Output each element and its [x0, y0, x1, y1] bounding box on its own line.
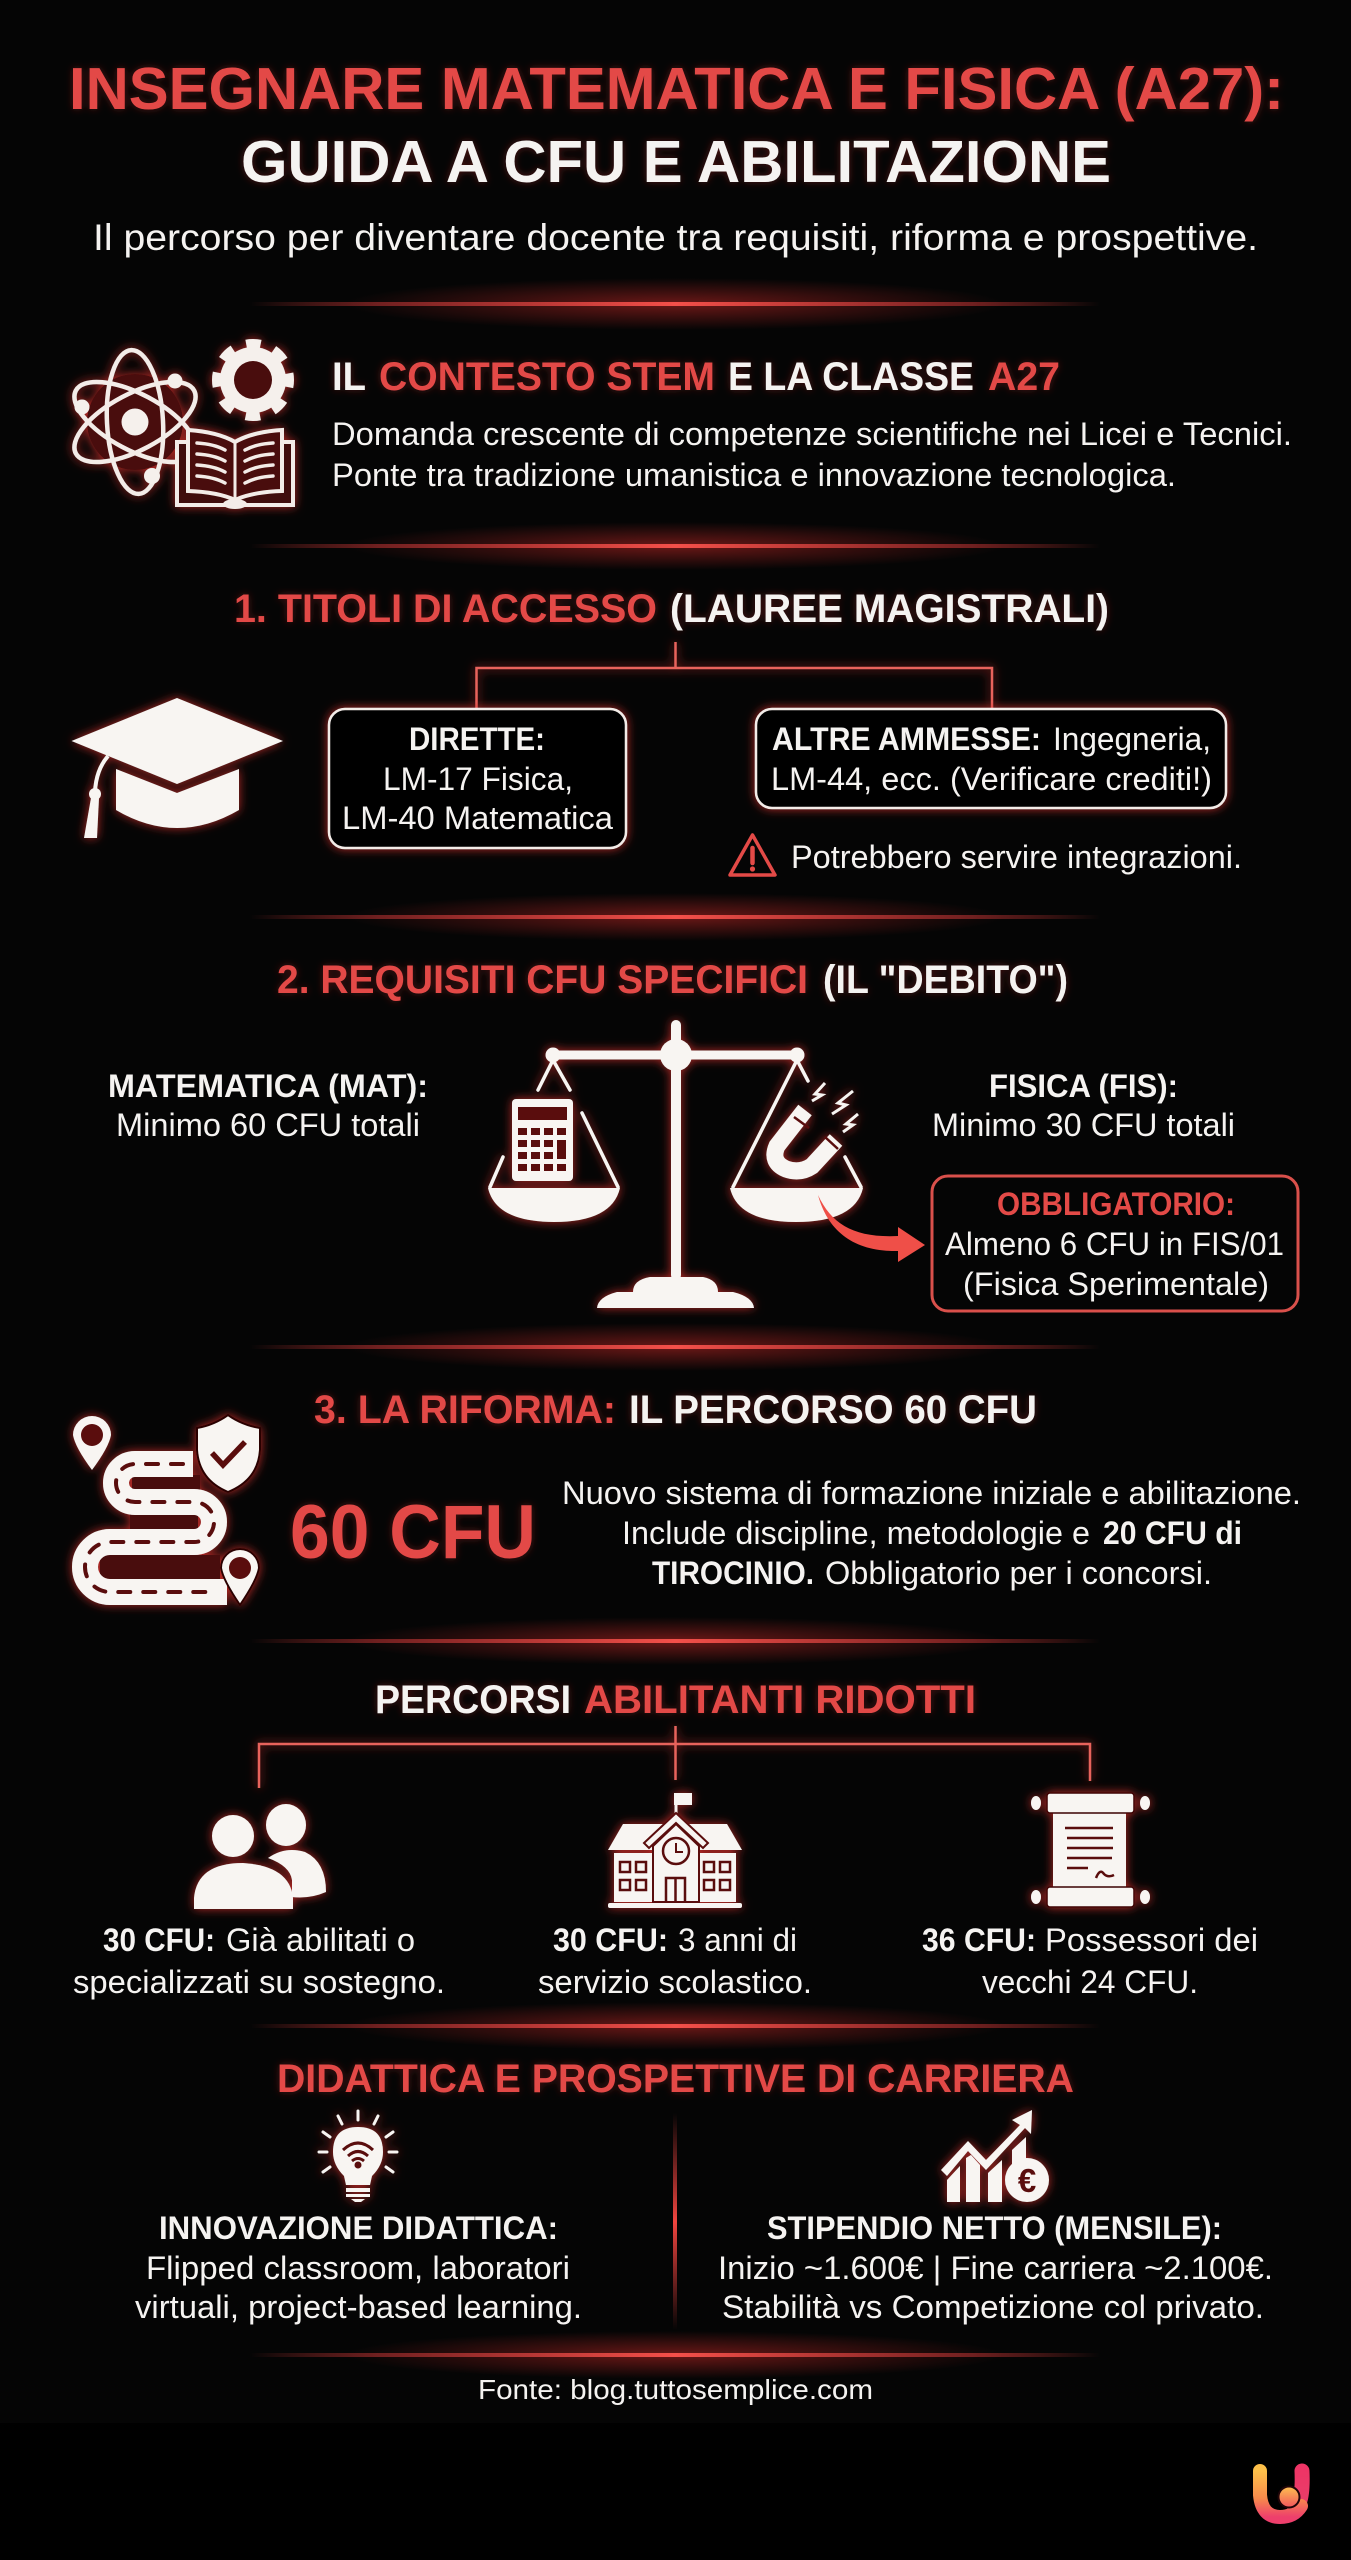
icon: atom, gear and book [63, 344, 293, 509]
text: gia abilitati [73, 1922, 445, 2000]
box: obbligatorio: OBBLIGATORIO: [997, 1186, 1235, 1222]
text: gia abilitati: Già abilitati o [226, 1922, 415, 1958]
icon: school [608, 1793, 742, 1908]
text: vecchi 24 CFU: vecchi 24 CFU. [982, 1964, 1198, 2000]
big number: 60 CFU: 60 CFU [290, 1490, 536, 1575]
text: riforma: Obbligatorio per i concorsi. [825, 1555, 1212, 1591]
source: Fonte: blog.tuttosemplice.com [478, 2374, 873, 2405]
text: contesto: Ponte tra tradizione umanistica e innovazione tecnologica. [332, 457, 1176, 493]
text: servizio: 3 anni di [678, 1922, 797, 1958]
box: altre ammesse: Ingegneria, [1053, 721, 1211, 757]
title: INSEGNARE MATEMATICA E FISICA (A27): [69, 56, 1284, 122]
box: dirette: LM-40 Matematica [342, 800, 613, 836]
text: fisica [932, 1068, 1235, 1143]
text: innovazione didattica: INNOVAZIONE DIDATTICA: [159, 2210, 558, 2246]
text: innovazione didattica: virtuali, project-based learning. [135, 2289, 582, 2325]
text: innovazione didattica: Flipped classroom, laboratori [146, 2250, 570, 2286]
box: dirette: LM-17 Fisica, [383, 761, 573, 797]
text: gia abilitati: 30 CFU: [103, 1922, 215, 1958]
heading: percorsi [375, 1678, 976, 1722]
text: matematica: MATEMATICA (MAT): [108, 1068, 428, 1104]
icon: light bulb [319, 2111, 397, 2202]
text: matematica [108, 1068, 428, 1143]
icon: scroll [1031, 1793, 1150, 1907]
text: vecchi 24 CFU: Possessori dei [1045, 1922, 1258, 1958]
icon: people [194, 1804, 326, 1909]
text: riforma: 20 CFU di [1103, 1515, 1242, 1551]
text: riforma: Nuovo sistema di formazione iniziale e abilitazione. [562, 1475, 1301, 1511]
box: obbligatorio [932, 1176, 1298, 1311]
text: fisica: Minimo 30 CFU totali [932, 1107, 1235, 1143]
icon: balance scale [488, 1020, 863, 1308]
heading: riforma [314, 1388, 1037, 1432]
arrow: to obbligatorio [818, 1195, 925, 1262]
panel: titoli di accesso [72, 587, 1242, 875]
box: dirette [329, 709, 626, 848]
subtitle: Il percorso per diventare docente tra requisiti, riforma e prospettive. [93, 217, 1258, 258]
text: servizio [538, 1922, 812, 2000]
heading: contesto: CONTESTO STEM [379, 355, 715, 399]
heading: contesto: E LA CLASSE [728, 355, 974, 399]
panel: riforma [73, 1388, 1301, 1605]
box: altre ammesse: ALTRE AMMESSE: [772, 721, 1041, 757]
icon: graduation cap [72, 698, 283, 838]
heading: percorsi: PERCORSI [375, 1678, 571, 1722]
text: servizio: 30 CFU: [553, 1922, 668, 1958]
icon: brand logo [1260, 2471, 1302, 2517]
text: matematica: Minimo 60 CFU totali [116, 1107, 420, 1143]
text: contesto [332, 416, 1292, 493]
panel: requisiti CFU [108, 958, 1298, 1311]
box: altre ammesse [756, 709, 1226, 808]
icon: calculator [512, 1099, 573, 1181]
panel: didattica e carriera [135, 2057, 1273, 2330]
heading: requisiti [277, 958, 1068, 1002]
icon: growth chart with euro: € [1018, 2162, 1036, 2199]
box: obbligatorio: (Fisica Sperimentale) [963, 1266, 1269, 1302]
heading: didattica: DIDATTICA E PROSPETTIVE DI CARRIERA [277, 2057, 1074, 2101]
text: fisica: FISICA (FIS): [989, 1068, 1178, 1104]
heading: riforma: 3. LA RIFORMA: [314, 1388, 616, 1432]
text: innovazione didattica [135, 2210, 582, 2325]
text: stipendio: Inizio ~1.600€ | Fine carriera ~2.100€. [718, 2250, 1273, 2286]
heading: contesto: A27 [988, 355, 1060, 399]
heading: titoli: 1. TITOLI DI ACCESSO [234, 587, 657, 631]
icon: warning [730, 835, 775, 875]
box: dirette: DIRETTE: [409, 721, 545, 757]
heading: requisiti: (IL "DEBITO") [823, 958, 1068, 1002]
text: riforma [562, 1475, 1301, 1591]
text: vecchi 24 CFU [922, 1922, 1258, 2000]
heading: requisiti: 2. REQUISITI CFU SPECIFICI [277, 958, 808, 1002]
icon: magnet [775, 1083, 858, 1171]
heading: contesto [332, 355, 1060, 399]
heading: riforma: IL PERCORSO 60 CFU [629, 1388, 1037, 1432]
text: contesto: Domanda crescente di competenze scientifiche nei Licei e Tecnici. [332, 416, 1292, 452]
text: riforma: TIROCINIO. [652, 1555, 814, 1591]
icon: growth chart with euro [941, 2110, 1049, 2202]
title: GUIDA A CFU E ABILITAZIONE [241, 129, 1111, 195]
text: stipendio [718, 2210, 1273, 2325]
text: stipendio: STIPENDIO NETTO (MENSILE): [767, 2210, 1222, 2246]
text: gia abilitati: specializzati su sostegno. [73, 1964, 445, 2000]
heading: titoli [234, 587, 1109, 631]
panel: percorsi ridotti [73, 1678, 1258, 2000]
heading: percorsi: ABILITANTI RIDOTTI [584, 1678, 976, 1722]
panel: contesto STEM [63, 344, 1292, 509]
text: servizio: servizio scolastico. [538, 1964, 812, 2000]
text: vecchi 24 CFU: 36 CFU: [922, 1922, 1036, 1958]
icon: road with pins and shield [73, 1415, 260, 1605]
box: altre ammesse: LM-44, ecc. (Verificare crediti!) [771, 761, 1212, 797]
heading: titoli: (LAUREE MAGISTRALI) [670, 587, 1109, 631]
text: stipendio: Stabilità vs Competizione col privato. [722, 2289, 1264, 2325]
title [69, 56, 1284, 195]
heading: contesto: IL [332, 355, 366, 399]
note: integrazioni: Potrebbero servire integrazioni. [791, 839, 1242, 875]
text: riforma: Include discipline, metodologie e [622, 1515, 1090, 1551]
box: obbligatorio: Almeno 6 CFU in FIS/01 [945, 1226, 1284, 1262]
